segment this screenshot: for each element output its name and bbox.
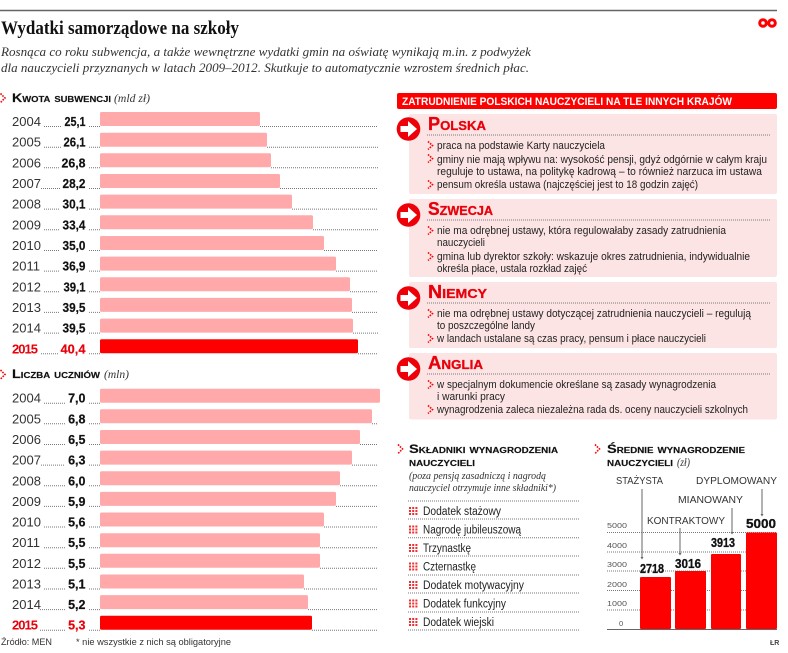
value labels: 3016 <box>675 557 701 571</box>
row 2015 highlighted: 40,4 <box>60 342 86 356</box>
row 2005: 26,1 <box>64 136 86 150</box>
row 2010 <box>12 512 378 530</box>
bullet list <box>428 225 750 275</box>
row 2009: 2009 <box>12 494 41 509</box>
bullet list: gminy nie mają wpływu na: wysokość pensji, gdyż odgórnie w całym kraju <box>437 154 767 166</box>
row 2013: 2013 <box>12 300 41 315</box>
row 2004 <box>12 112 378 129</box>
row 2004: 7,0 <box>68 392 86 406</box>
row 2015 highlighted: 2015 <box>12 618 38 633</box>
row 2007: 6,3 <box>68 454 86 468</box>
row 2010: 2010 <box>12 514 41 530</box>
bullet list <box>428 379 748 416</box>
row 2013: 2013 <box>12 576 41 592</box>
bullet list: nie ma odrębnej ustawy dotyczącej zatrudnienia nauczycieli – regulują <box>437 308 752 320</box>
row 2009: 33,4 <box>62 218 86 232</box>
row 2008 <box>12 195 378 212</box>
bullet list: nie ma odrębnej ustawy, która regulowałaby zasady zatrudnienia <box>437 225 727 237</box>
row 2015 highlighted: 5,3 <box>68 619 86 633</box>
bullet list: pensum określa ustawa (najczęściej jest to 18 godzin zajęć) <box>437 179 698 191</box>
row 2014 <box>12 319 378 336</box>
row 2009: 2009 <box>12 217 41 232</box>
row 2006: 6,5 <box>68 433 86 447</box>
row 2013: 5,1 <box>68 578 86 592</box>
value labels: 2718 <box>640 562 664 576</box>
leader lines <box>640 489 764 560</box>
row 2010: 2010 <box>12 238 41 253</box>
row 2006: 2006 <box>12 432 41 447</box>
bullet list: nauczycieli <box>437 237 485 249</box>
heading: liczba uczniów: Liczba uczniów <box>12 367 101 381</box>
country name: Polska <box>428 114 487 134</box>
author credit: ŁR <box>770 640 779 647</box>
row 2010: 5,6 <box>68 516 86 530</box>
bullet list: reguluje to ustawa, na politykę kadrową – to również narzuca im ustawa <box>437 166 763 178</box>
row 2013 <box>12 574 378 592</box>
axis labels: 0 <box>619 619 623 628</box>
bullet list: określa płace, ustala rozkład zajęć <box>437 263 587 275</box>
category labels: STAŻYSTA <box>616 474 663 487</box>
row 2010: 35,0 <box>62 239 86 253</box>
row 2011: 5,5 <box>68 536 86 550</box>
row 2006 <box>12 430 378 447</box>
item: czternastkę: Czternastkę <box>423 562 476 574</box>
category labels <box>616 474 777 527</box>
axis labels: 1000 <box>607 599 627 608</box>
row 2007 <box>12 174 378 191</box>
subheading note: (poza pensją zasadniczą i nagrodą <box>409 470 546 482</box>
row 2004: 2004 <box>12 114 41 129</box>
panel: średnie wynagrodzenie <box>595 441 777 630</box>
row 2011: 36,9 <box>62 260 86 274</box>
footnote: * nie wszystkie z nich są obligatoryjne <box>76 637 231 648</box>
value labels: 5000 <box>746 517 776 531</box>
row 2011 <box>12 257 378 274</box>
panel: Polska <box>397 114 777 194</box>
row 2004: 2004 <box>12 391 41 406</box>
icon: arrow <box>397 203 420 227</box>
row 2012: 5,5 <box>68 557 86 571</box>
axis labels: 2000 <box>607 580 627 589</box>
heading: Składniki wynagrodzenia <box>409 442 558 456</box>
intro text <box>0 44 531 75</box>
item: trzynastkę <box>409 543 471 555</box>
row 2015 highlighted <box>12 616 378 633</box>
intro text: dla nauczycieli przyznanych w latach 2009–2012. Skutkuje to automatycznie wzrostem średnich płac. <box>1 60 529 75</box>
row 2015 highlighted <box>12 339 378 356</box>
row 2004 <box>12 389 380 406</box>
row 2008: 2008 <box>12 197 41 212</box>
item: dodatek funkcyjny: Dodatek funkcyjny <box>423 598 506 610</box>
row 2012: 2012 <box>12 556 41 571</box>
row 2009 <box>12 215 378 232</box>
bullet list: wynagrodzenia zaleca niezależna rada ds. oceny nauczycieli szkolnych <box>436 404 748 416</box>
axis labels: 3000 <box>607 560 627 569</box>
chart: kwota subwencji <box>0 91 378 356</box>
row 2005: 2005 <box>12 135 41 150</box>
heading: (zł) <box>677 455 690 469</box>
heading: nauczycieli <box>607 455 673 469</box>
subheading note: nauczyciel otrzymuje inne składniki*) <box>409 482 556 494</box>
bullet list <box>428 140 767 191</box>
subheading note <box>409 470 556 494</box>
row 2005: 6,8 <box>68 412 86 426</box>
title: Wydatki samorządowe na szkoły <box>1 19 240 39</box>
publisher logo <box>758 18 777 28</box>
panel: składniki wynagrodzenia <box>398 442 580 630</box>
row 2012: 39,1 <box>64 280 86 294</box>
row 2008: 30,1 <box>62 198 86 212</box>
country name: Niemcy <box>428 282 487 302</box>
icon: arrow <box>397 117 420 141</box>
bars <box>640 532 777 629</box>
axis labels: 4000 <box>607 541 627 550</box>
row 2005 <box>12 133 378 150</box>
row 2008: 2008 <box>12 473 41 488</box>
row 2015 highlighted: 2015 <box>12 341 38 356</box>
row 2010 <box>12 236 378 253</box>
row 2011: 2011 <box>12 259 40 274</box>
row 2014: 2014 <box>12 321 41 336</box>
bullet list: praca na podstawie Karty nauczyciela <box>437 140 606 152</box>
heading: liczba uczniów: (mln) <box>104 367 129 381</box>
row 2013 <box>12 298 378 315</box>
row 2011 <box>12 533 378 550</box>
category labels: DYPLOMOWANY <box>696 475 777 487</box>
heading: kwota subwencji: Kwota subwencji <box>12 91 111 105</box>
item: dodatek motywacyjny: Dodatek motywacyjny <box>423 580 524 592</box>
icon: arrow <box>397 286 420 310</box>
item: nagrodę jubileuszową: Nagrodę jubileuszową <box>423 524 522 536</box>
heading: nauczycieli <box>409 455 475 469</box>
row 2014: 39,5 <box>62 322 86 336</box>
country name: Anglia <box>428 353 484 373</box>
heading: kwota subwencji: (mld zł) <box>114 91 150 105</box>
category labels: KONTRAKTOWY <box>647 515 725 527</box>
bullet list: i warunki pracy <box>437 391 505 403</box>
row 2007: 2007 <box>12 453 41 468</box>
bullet list: gmina lub dyrektor szkoły: wskazuje okres zatrudnienia, indywidualnie <box>437 251 750 263</box>
heading: liczba uczniów <box>0 367 129 381</box>
row 2012 <box>12 554 378 571</box>
source note: Źródło: MEN <box>1 637 52 648</box>
bullet list: w landach ustalane są czas pracy, pensum i płace nauczycieli <box>436 333 706 345</box>
row 2007 <box>12 451 378 468</box>
item: trzynastkę: Trzynastkę <box>423 543 471 555</box>
row 2004: 25,1 <box>64 115 86 129</box>
grid lines <box>607 532 777 610</box>
row 2007: 28,2 <box>62 177 86 191</box>
value labels: 3913 <box>711 536 735 550</box>
value labels <box>640 517 776 576</box>
comparison header bar: ZATRUDNIENIE POLSKICH NAUCZYCIELI NA TLE INNYCH KRAJÓW <box>402 95 733 108</box>
panel: Szwecja <box>397 199 777 277</box>
heading: Średnie wynagrodzenie <box>607 441 746 456</box>
row 2005: 2005 <box>12 411 41 426</box>
bullet list: w specjalnym dokumencie określane są zasady wynagrodzenia <box>436 379 717 391</box>
row 2014: 2014 <box>12 597 41 612</box>
category labels: MIANOWANY <box>678 494 743 506</box>
row 2013: 39,5 <box>62 301 86 315</box>
panel: Niemcy <box>397 282 777 348</box>
country name: Szwecja <box>428 199 494 219</box>
row 2008: 6,0 <box>68 474 86 488</box>
row 2007: 2007 <box>12 176 41 191</box>
chart: liczba uczniów <box>0 367 380 633</box>
item: dodatek wiejski: Dodatek wiejski <box>423 617 494 629</box>
bullet list: to poszczególne landy <box>437 320 535 332</box>
row 2005 <box>12 409 378 426</box>
bullet list <box>428 308 752 345</box>
row 2012 <box>12 277 378 294</box>
heading: kwota subwencji <box>0 91 150 105</box>
row 2009: 5,9 <box>68 495 86 509</box>
axis labels: 5000 <box>607 521 627 530</box>
row 2011: 2011 <box>12 535 40 550</box>
row 2006: 26,8 <box>62 156 86 170</box>
heading <box>398 442 558 469</box>
row 2012: 2012 <box>12 279 41 294</box>
icon: arrow <box>397 357 420 381</box>
row 2014: 5,2 <box>68 598 86 612</box>
item: dodatek stażowy: Dodatek stażowy <box>423 506 501 518</box>
heading <box>595 441 746 469</box>
panel: Anglia <box>397 353 777 420</box>
row 2008 <box>12 471 378 488</box>
axis labels <box>607 521 627 628</box>
intro text: Rosnąca co roku subwencja, a także wewnętrzne wydatki gmin na oświatę wynikają m.in. z podwyżek <box>0 44 531 59</box>
row 2006: 2006 <box>12 155 41 170</box>
row 2014 <box>12 595 378 612</box>
row 2009 <box>12 492 378 509</box>
row 2006 <box>12 153 378 170</box>
